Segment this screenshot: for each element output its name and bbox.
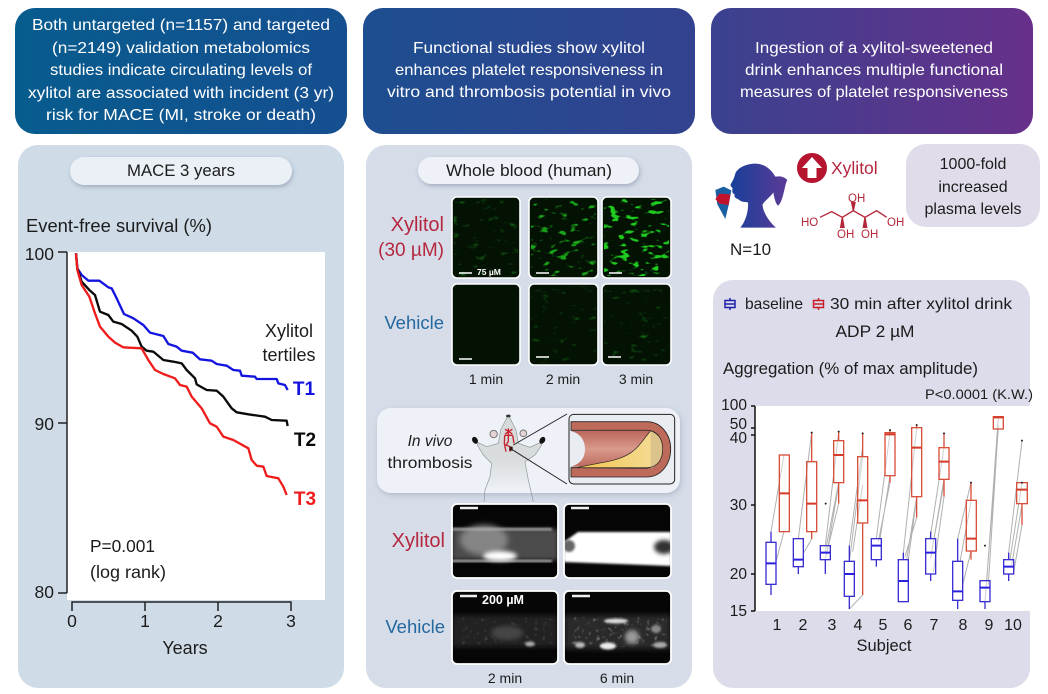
legend: xylitol tertiles — [262, 321, 316, 510]
in vivo thrombosis banner — [377, 408, 680, 502]
header: xylitol-sweetened drink ingestion: drink enhances multiple functional — [745, 62, 1003, 79]
legend — [725, 296, 1013, 313]
x axis labels: 2 — [799, 617, 808, 634]
survival chart: 1 — [140, 611, 150, 631]
baseline boxes — [766, 532, 1014, 609]
survival chart: 0 — [67, 611, 77, 631]
in vivo thrombosis banner: In vivo — [408, 433, 453, 450]
callout: 1000-fold increased plasma levels — [906, 144, 1040, 227]
x axis title: Years — [162, 638, 208, 658]
box plot: 20 — [730, 566, 747, 583]
xylitol molecule: HO — [801, 217, 818, 229]
time labels: thrombosis — [488, 670, 634, 686]
legend: xylitol tertiles: T1 — [293, 379, 316, 400]
panel: MACE survival — [18, 145, 344, 688]
xylitol molecule: OH — [837, 229, 854, 241]
image frames and scale bars: thrombosis — [452, 504, 671, 664]
baseline medians — [766, 546, 1014, 591]
panel: platelet aggregation — [713, 280, 1033, 688]
time labels: thrombosis: 2 min — [488, 670, 522, 686]
micrographs: vehicle — [452, 284, 671, 365]
x axis labels: 7 — [930, 617, 939, 634]
xylitol molecule: OH — [848, 193, 865, 205]
row labels: whole blood: Xylitol — [391, 214, 444, 236]
x axis labels: 4 — [854, 617, 863, 634]
x axis labels: 10 — [1004, 617, 1022, 634]
box plot: 100 — [721, 397, 747, 414]
icon: woman drinking — [715, 164, 787, 228]
header: untargeted and targeted metabolomics — [15, 8, 347, 134]
paired subject lines — [771, 417, 1022, 609]
time labels: whole blood — [469, 371, 653, 387]
xylitol molecule — [801, 193, 904, 241]
header: untargeted and targeted metabolomics: risk for MACE (MI, stroke or death) — [46, 107, 316, 124]
header: functional studies — [363, 8, 695, 134]
x axis labels: 3 — [828, 617, 837, 634]
survival chart: 3 — [286, 611, 296, 631]
pill heading: MACE 3 years — [70, 157, 292, 185]
icon: artery with plaque — [569, 414, 675, 484]
x axis labels: 9 — [985, 617, 994, 634]
label: N=10: N=10 — [730, 240, 771, 259]
p value: (log rank) — [90, 562, 166, 582]
in vivo thrombosis banner: thrombosis — [388, 455, 472, 472]
time labels: whole blood: 1 min — [469, 371, 503, 387]
x axis labels: 5 — [879, 617, 888, 634]
header: functional studies: Functional studies show xylitol — [413, 40, 645, 57]
survival chart — [25, 244, 325, 658]
header: xylitol-sweetened drink ingestion: Ingestion of a xylitol-sweetened — [755, 40, 993, 57]
p value — [90, 536, 166, 582]
outlier points — [811, 424, 1023, 547]
pill heading: Whole blood (human) — [418, 157, 639, 184]
label: Xylitol: Xylitol — [831, 158, 878, 178]
legend: xylitol tertiles: tertiles — [262, 345, 316, 365]
row labels: whole blood: (30 µM) — [378, 240, 444, 261]
header: functional studies: enhances platelet responsiveness in — [395, 62, 663, 79]
header: untargeted and targeted metabolomics: studies indicate circulating levels of — [50, 62, 313, 79]
row labels: whole blood: Vehicle — [384, 312, 444, 333]
legend: baseline — [745, 296, 803, 313]
survival chart: 100 — [25, 244, 54, 264]
box plot: 50 — [730, 416, 747, 433]
x axis labels: 6 — [904, 617, 913, 634]
pill heading: MACE 3 years: MACE 3 years — [127, 162, 235, 180]
legend: xylitol tertiles: Xylitol — [265, 321, 313, 341]
thrombus image: vehicle 2 min — [452, 592, 558, 664]
header: untargeted and targeted metabolomics: xylitol are associated with incident (3 yr) — [28, 85, 334, 102]
thrombus image: vehicle 6 min — [564, 592, 670, 664]
xylitol boxes — [779, 417, 1027, 595]
y axis title: Event-free survival (%) — [26, 216, 212, 236]
label: ADP 2 µM: ADP 2 µM — [836, 323, 914, 341]
micrographs: xylitol — [452, 197, 671, 278]
thrombus image: xylitol 6 min — [564, 504, 670, 578]
time labels: whole blood: 2 min — [546, 371, 580, 387]
header: functional studies: vitro and thrombosis potential in vivo — [387, 84, 671, 101]
x axis labels: 8 — [959, 617, 968, 634]
xylitol molecule: OH — [887, 217, 904, 229]
callout: 1000-fold increased plasma levels: plasma levels — [925, 201, 1021, 218]
x axis title: Subject — [856, 637, 912, 655]
y axis title: Aggregation (% of max amplitude) — [723, 360, 978, 378]
callout: 1000-fold increased plasma levels: increased — [938, 179, 1008, 196]
survival chart: 2 — [213, 611, 223, 631]
header: xylitol-sweetened drink ingestion — [711, 8, 1033, 134]
row labels: thrombosis: Vehicle — [385, 616, 445, 637]
icon: xylitol up arrow — [797, 153, 827, 183]
micrographs: xylitol: 75 µM — [477, 267, 501, 277]
x axis labels — [773, 617, 1022, 634]
icon: mouse — [471, 414, 567, 502]
x axis labels: 1 — [773, 617, 782, 634]
xylitol medians — [779, 417, 1027, 539]
legend: xylitol tertiles: T3 — [294, 489, 316, 510]
xylitol molecule: OH — [861, 229, 878, 241]
survival chart: 80 — [35, 582, 54, 602]
survival chart: 90 — [35, 414, 54, 434]
box plot — [721, 397, 1031, 655]
legend: xylitol tertiles: T2 — [294, 430, 316, 451]
row labels: thrombosis — [385, 530, 445, 637]
box plot: 15 — [730, 603, 747, 620]
row labels: whole blood — [378, 214, 444, 333]
time labels: thrombosis: 6 min — [600, 670, 634, 686]
header: untargeted and targeted metabolomics: (n=2149) validation metabolomics — [52, 40, 310, 57]
header: untargeted and targeted metabolomics: Both untargeted (n=1157) and targeted — [32, 17, 330, 34]
header: xylitol-sweetened drink ingestion: measures of platelet responsiveness — [740, 84, 1008, 101]
pill heading: Whole blood (human): Whole blood (human) — [446, 162, 612, 180]
thrombus image: xylitol 2 min — [452, 504, 558, 578]
p value: P=0.001 — [90, 536, 155, 556]
box plot: 40 — [730, 430, 747, 447]
p value: P<0.0001 (K.W.) — [925, 387, 1033, 402]
callout: 1000-fold increased plasma levels: 1000-fold — [940, 156, 1006, 173]
time labels: whole blood: 3 min — [619, 371, 653, 387]
legend: 30 min after xylitol drink — [830, 296, 1013, 313]
row labels: thrombosis: Xylitol — [392, 530, 445, 552]
panel: functional studies — [366, 145, 692, 688]
box plot: 30 — [730, 497, 747, 514]
image frames and scale bars: thrombosis: 200 µM — [482, 593, 524, 607]
survival curves — [76, 253, 288, 495]
